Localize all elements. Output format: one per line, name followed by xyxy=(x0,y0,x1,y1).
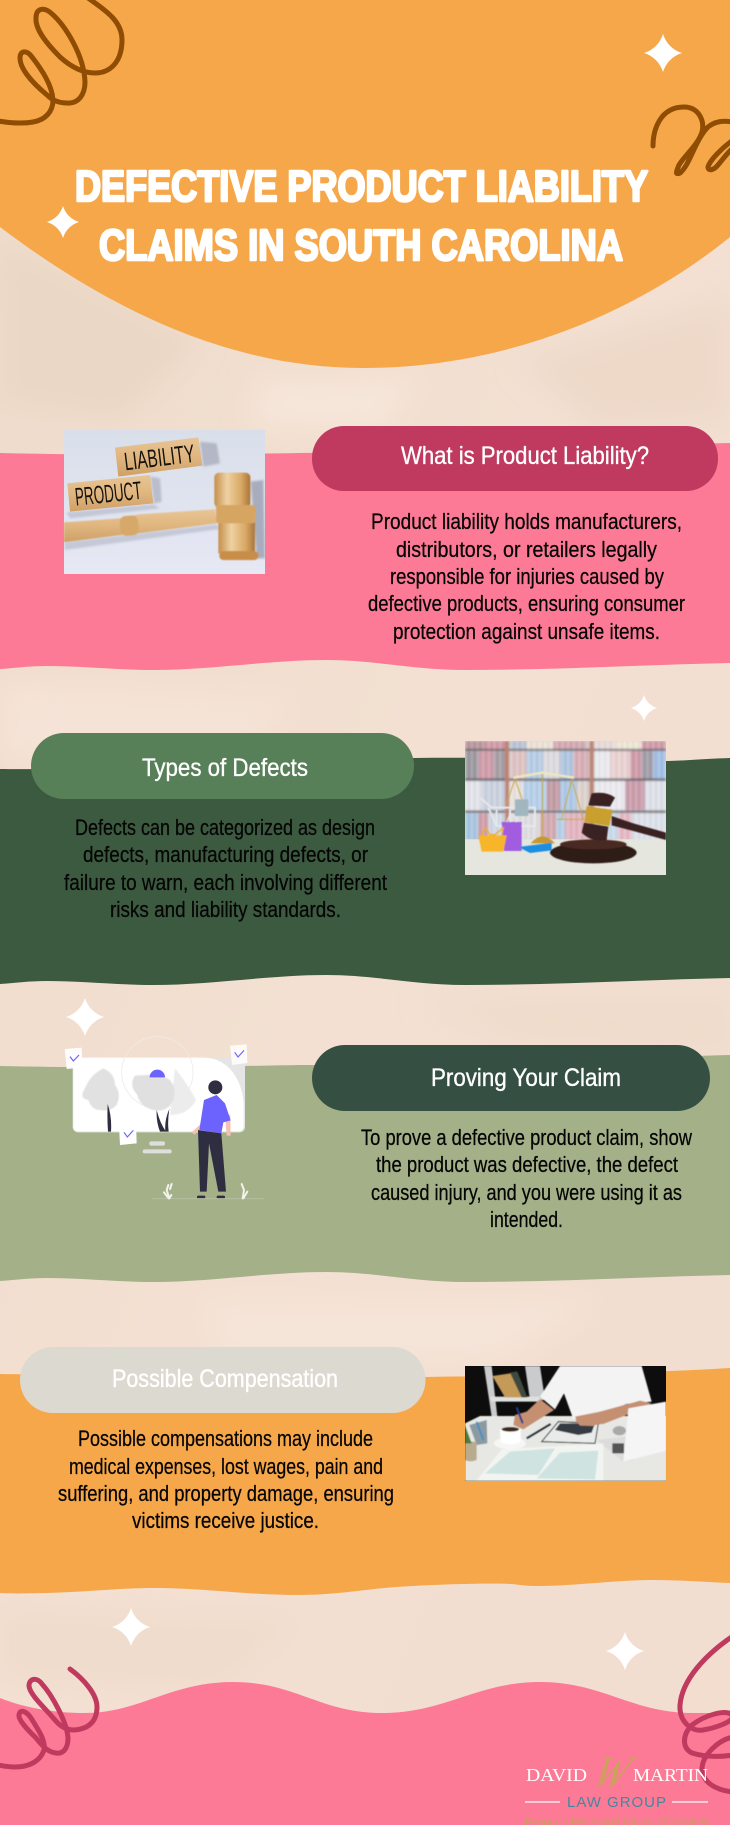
text block: types of defects description xyxy=(64,815,388,922)
wooden block: liability: LIABILITY xyxy=(123,440,196,476)
photo: man using calculator at desk xyxy=(465,1366,667,1481)
pill heading: types of defects: Types of Defects xyxy=(142,754,308,782)
coffee cup xyxy=(494,1439,526,1449)
arm holding pen xyxy=(513,1399,554,1429)
pill heading: possible compensation xyxy=(20,1347,426,1413)
logo: David W. Martin Law Group xyxy=(525,1748,708,1825)
orange band xyxy=(0,1368,730,1595)
icon: sparkle top right xyxy=(644,34,682,72)
paperwork xyxy=(477,1443,603,1481)
clipboard and calculator xyxy=(542,1422,598,1443)
orange header shape xyxy=(0,0,730,368)
trees xyxy=(82,1068,196,1115)
thin circle xyxy=(122,1037,193,1108)
logo: David W. Martin Law Group: DAVID xyxy=(526,1765,587,1785)
text block: possible compensation description: Possible compensations may include xyxy=(78,1426,373,1451)
icon: sparkle bottom left xyxy=(112,1608,150,1646)
pink band xyxy=(0,443,730,670)
text block: proving your claim description xyxy=(361,1125,693,1232)
gavel handle xyxy=(64,509,217,542)
bookshelves xyxy=(465,741,666,840)
illustration: person viewing board with trees xyxy=(65,1037,264,1199)
shirt xyxy=(540,1366,652,1419)
wooden block: liability xyxy=(115,437,202,477)
desk xyxy=(465,1416,667,1481)
yellow basket xyxy=(478,835,507,852)
text block: possible compensation description xyxy=(58,1426,394,1533)
icon: top-left squiggle xyxy=(0,0,122,123)
text block: types of defects description: defects, manufacturing defects, or xyxy=(83,842,368,867)
laptop xyxy=(598,1437,625,1460)
board xyxy=(73,1058,245,1132)
icon: sparkle above illustration xyxy=(66,998,104,1036)
title: CLAIMS IN SOUTH CAROLINA xyxy=(99,221,623,270)
photo: wooden gavel and product liability blocks xyxy=(64,430,265,574)
person xyxy=(192,1080,231,1199)
icon: sparkle bottom right xyxy=(606,1632,644,1670)
table xyxy=(465,839,666,875)
text block: types of defects description: risks and liability standards. xyxy=(110,897,341,922)
panel: what is product liability xyxy=(0,426,730,670)
wooden block: product xyxy=(67,475,153,512)
logo: David W. Martin Law Group: W xyxy=(586,1748,641,1797)
logo: David W. Martin Law Group: MARTIN xyxy=(633,1765,708,1785)
pencil cup and plant xyxy=(469,1420,487,1445)
icon: sparkle above green band xyxy=(631,695,657,721)
title xyxy=(75,162,648,270)
shelf xyxy=(484,1366,545,1417)
balance scale xyxy=(505,773,584,836)
text block: possible compensation description: victims receive justice. xyxy=(132,1508,319,1533)
text block: types of defects description: failure to warn, each involving different xyxy=(64,870,388,895)
text block: product liability description xyxy=(368,509,685,644)
text block: proving your claim description: intended. xyxy=(490,1207,563,1232)
pill heading: proving your claim xyxy=(312,1045,710,1111)
icon: sparkle left of title xyxy=(47,206,79,238)
pink wave xyxy=(0,1682,730,1825)
header panel xyxy=(0,0,730,368)
pill heading: what is product liability: What is Product Liability? xyxy=(401,442,649,470)
gavel head xyxy=(214,473,250,508)
photo: gavel, scales and library shelves xyxy=(465,741,666,875)
text block: product liability description: Product liability holds manufacturers, xyxy=(371,509,682,534)
blue half circle xyxy=(150,1070,165,1077)
purple bag xyxy=(502,822,522,851)
gavel xyxy=(550,842,637,863)
icon: bottom-left squiggle xyxy=(0,1669,97,1767)
text block: product liability description: distributors, or retailers legally xyxy=(396,537,658,562)
logo: David W. Martin Law Group: LAW GROUP xyxy=(567,1794,666,1811)
wooden block: product: PRODUCT xyxy=(74,477,143,512)
pill heading: what is product liability xyxy=(312,426,718,491)
blue folder xyxy=(518,843,552,853)
forearm and hand on calculator xyxy=(575,1401,652,1426)
text block: types of defects description: Defects can be categorized as design xyxy=(75,815,375,840)
bars under board xyxy=(143,1141,172,1153)
text block: product liability description: protection against unsafe items. xyxy=(393,619,660,644)
pill heading: types of defects xyxy=(31,733,414,799)
footer panel xyxy=(0,1608,730,1825)
tree trunks xyxy=(107,1104,169,1132)
dark green band xyxy=(0,758,730,985)
panel: proving your claim xyxy=(0,998,730,1282)
shopping cart xyxy=(480,798,535,826)
pill heading: possible compensation: Possible Compensation xyxy=(112,1365,338,1393)
pill heading: proving your claim: Proving Your Claim xyxy=(431,1064,621,1092)
ground and plants xyxy=(152,1184,264,1199)
sage green band xyxy=(0,1055,730,1282)
panel: possible compensation xyxy=(0,1347,730,1595)
panel: types of defects xyxy=(0,733,730,985)
icon: top-right squiggle xyxy=(653,107,730,174)
icon: bottom-right squiggle xyxy=(680,1636,730,1792)
text block: possible compensation description: medical expenses, lost wages, pain and xyxy=(69,1454,383,1479)
text block: product liability description: responsible for injuries caused by xyxy=(390,564,665,589)
note cards with check marks xyxy=(65,1044,247,1145)
text block: possible compensation description: suffering, and property damage, ensuring xyxy=(58,1481,394,1506)
